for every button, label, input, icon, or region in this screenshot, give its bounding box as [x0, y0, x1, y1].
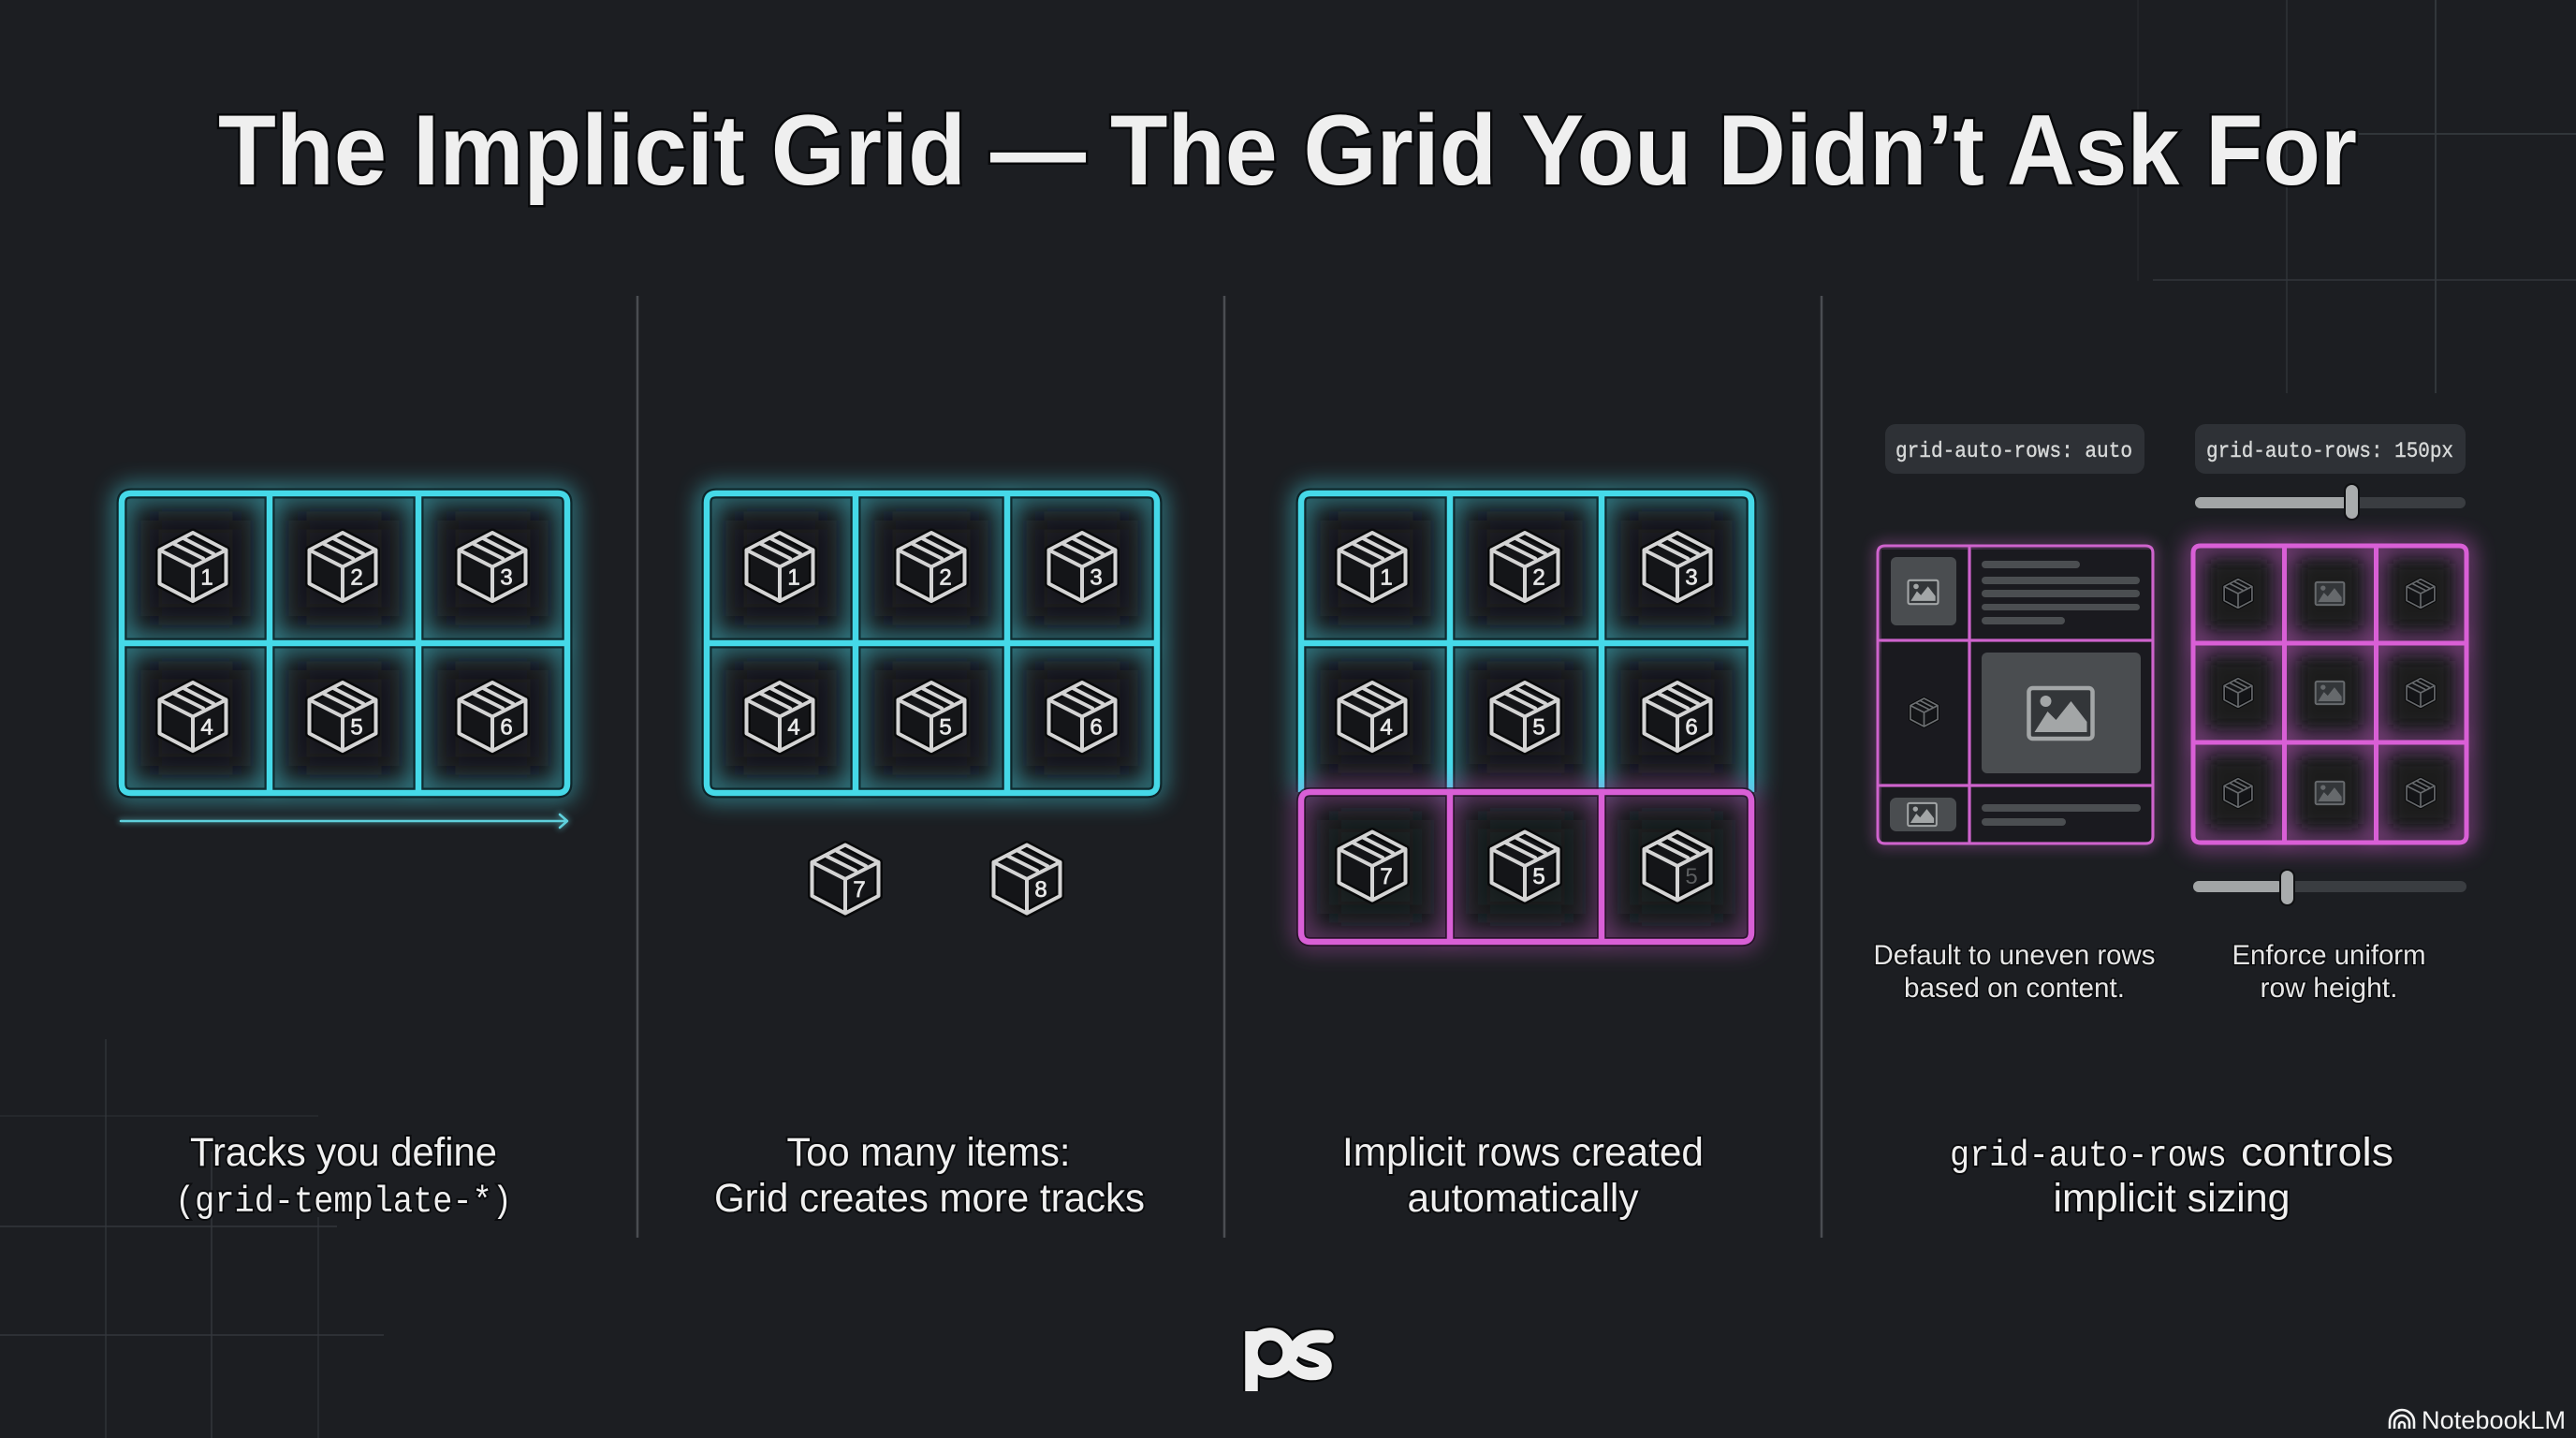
caption	[1950, 1130, 2393, 1221]
caption: controls	[2241, 1130, 2393, 1175]
caption: implicit sizing	[2054, 1176, 2290, 1221]
icon: boxes: 1	[1380, 565, 1393, 590]
title: The Grid You Didn’t Ask For	[1110, 94, 2357, 206]
caption: Too many items:	[786, 1130, 1071, 1175]
icon: overflow boxes 7 and 8: 7	[853, 877, 866, 902]
uniform grid icons	[2224, 580, 2435, 807]
icon: boxes 1-6: 3	[1090, 565, 1103, 590]
explicit grid	[707, 493, 1157, 793]
icon: boxes 1-6: 1	[200, 565, 213, 590]
note: 150px: Enforce uniform	[2232, 940, 2426, 971]
note: auto: based on content.	[1904, 973, 2125, 1004]
caption: (grid-template-*)	[175, 1181, 512, 1223]
title: The Implicit Grid	[218, 94, 966, 206]
caption: automatically	[1408, 1176, 1639, 1221]
icon: boxes 1-6	[747, 533, 1116, 751]
icon: boxes 1-6: 3	[500, 565, 513, 590]
icon: boxes 1-6: 5	[350, 715, 363, 740]
icon: boxes: 7	[1380, 864, 1393, 889]
icon: boxes: 3	[1685, 565, 1698, 590]
explicit grid	[1301, 493, 1751, 792]
icon: boxes: 5	[1532, 715, 1545, 740]
icon: boxes 1-6: 4	[787, 715, 800, 740]
logo: ps	[1251, 1331, 1327, 1391]
code label: 150px: grid-auto-rows: 150px	[2206, 439, 2453, 463]
caption: Implicit rows created	[1342, 1130, 1704, 1175]
caption	[714, 1130, 1145, 1221]
icon: boxes 1-6: 5	[939, 715, 952, 740]
code label: 150px	[2195, 424, 2466, 474]
icon: boxes 1-6	[159, 533, 526, 751]
panel: implicit rows	[1301, 493, 1751, 1221]
icon: boxes	[1339, 533, 1711, 901]
icon: boxes 1-6: 2	[939, 565, 952, 590]
note: 150px: row height.	[2260, 973, 2398, 1004]
explicit grid	[122, 493, 567, 793]
icon: boxes 1-6: 4	[200, 715, 213, 740]
icon: boxes: 4	[1380, 715, 1393, 740]
code label: auto	[1885, 424, 2144, 474]
icon: boxes 1-6: 2	[350, 565, 363, 590]
caption	[1342, 1130, 1704, 1221]
implicit row grid	[1301, 792, 1751, 942]
panel: grid-auto-rows	[1874, 424, 2466, 1221]
icon: boxes: 5	[1532, 864, 1545, 889]
uniform grid	[2193, 546, 2466, 843]
bottom slider	[2193, 869, 2466, 906]
uneven grid	[1878, 546, 2153, 844]
column dividers	[637, 296, 1822, 1238]
caption: grid-auto-rows	[1950, 1136, 2227, 1177]
code label: auto: grid-auto-rows: auto	[1895, 439, 2132, 463]
caption: Tracks you define	[190, 1130, 497, 1175]
panel: too many items	[707, 493, 1157, 1221]
icon: boxes 1-6: 6	[1090, 715, 1103, 740]
icon: notebooklm	[2390, 1410, 2414, 1429]
note: auto: Default to uneven rows	[1874, 940, 2155, 971]
icon: boxes: 6	[1685, 715, 1698, 740]
caption: Grid creates more tracks	[714, 1176, 1145, 1221]
icon: boxes 1-6: 1	[787, 565, 800, 590]
icon: boxes: 2	[1532, 565, 1545, 590]
panel: tracks you define	[121, 493, 567, 1223]
icon: boxes 1-6: 6	[500, 715, 513, 740]
title: —	[990, 94, 1086, 206]
note: 150px	[2232, 940, 2426, 1004]
note: auto	[1874, 940, 2155, 1004]
icon: overflow boxes 7 and 8	[812, 844, 1060, 914]
top slider	[2195, 483, 2466, 521]
arrow	[121, 814, 567, 828]
uneven grid contents	[1890, 557, 2141, 831]
caption	[175, 1130, 512, 1223]
title	[218, 94, 2357, 206]
icon: boxes: 5	[1685, 864, 1698, 889]
NotebookLM mark: NotebookLM	[2422, 1406, 2566, 1434]
icon: overflow boxes 7 and 8: 8	[1034, 877, 1047, 902]
